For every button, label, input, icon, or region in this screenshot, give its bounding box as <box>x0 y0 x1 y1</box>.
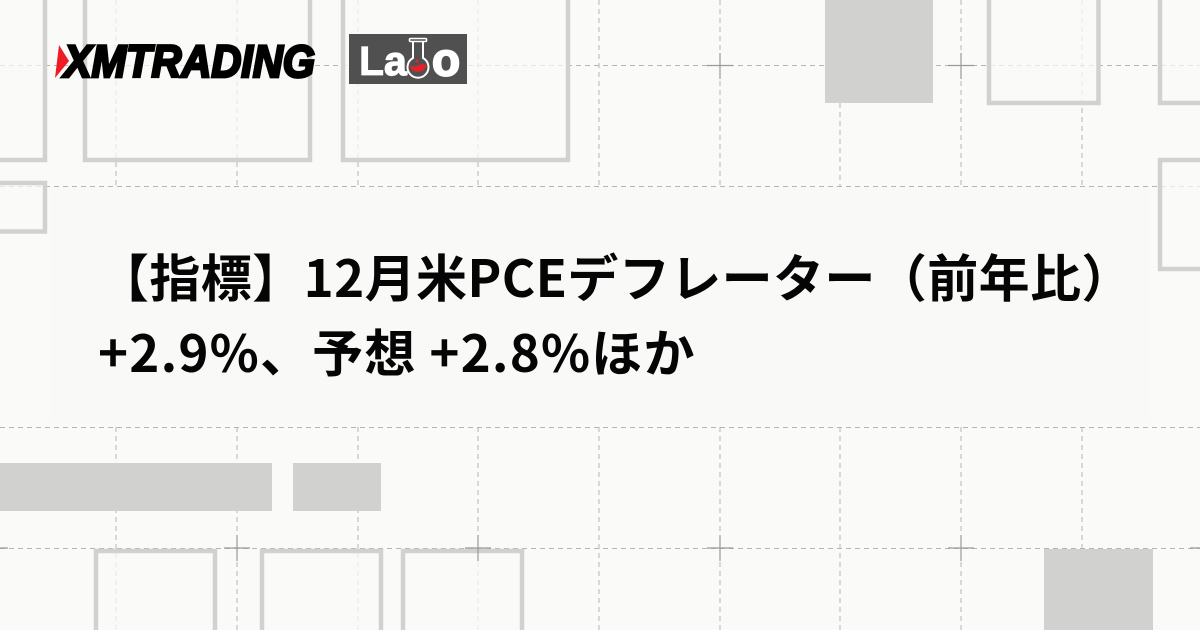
title: 【指標】12月米PCEデフレーター（前年比） <box>98 238 1133 312</box>
title: +2.9%、予想 +2.8%ほか <box>98 313 696 387</box>
logo letters: L <box>359 38 384 84</box>
XMTRADING logo <box>55 38 316 84</box>
icon: flask <box>408 38 428 78</box>
title <box>98 238 1133 387</box>
logo letters: a <box>384 38 408 84</box>
icon: red arrow <box>55 45 69 78</box>
logo letters <box>359 34 460 86</box>
outlined frames: bottom row <box>96 551 522 630</box>
Lab logo <box>349 34 467 84</box>
outlined frames: top row <box>0 0 1200 269</box>
title band <box>50 187 1150 423</box>
